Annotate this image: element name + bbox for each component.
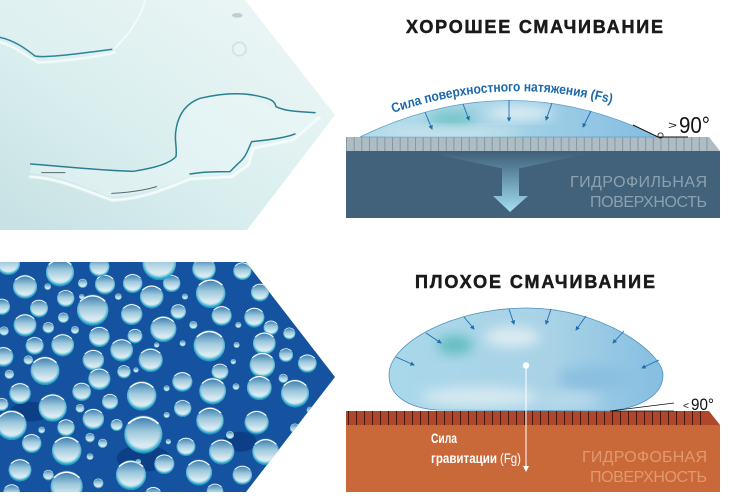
diagram: poor wetting on hydrophobic surface [346, 308, 720, 492]
photo: water beads on blue surface [0, 247, 335, 500]
gravity label [431, 431, 521, 466]
flat water drop [360, 100, 658, 138]
gravity label: Сила [431, 431, 457, 446]
surface label: ПОВЕРХНОСТЬ [590, 194, 707, 211]
contact angle: > [668, 120, 677, 132]
surface label: ГИДРОФОБНАЯ [582, 449, 707, 466]
hydrophobic block [346, 425, 720, 492]
contact angle [633, 112, 710, 138]
surface band [346, 411, 720, 425]
contact angle: 90° [679, 112, 710, 138]
gravity arrow [523, 362, 529, 472]
contact angle: 90° [691, 395, 714, 414]
surface band [346, 137, 720, 151]
gravity label: (Fg) [500, 451, 521, 466]
surface label: ПОВЕРХНОСТЬ [590, 469, 707, 486]
surface label [570, 174, 707, 211]
surface tension label: Сила поверхностного натяжения (Fs) [392, 84, 612, 112]
spreading arrow [430, 153, 590, 212]
hydrophilic block [346, 151, 720, 218]
heading: good wetting: ХОРОШЕЕ СМАЧИВАНИЕ [406, 17, 663, 37]
surface label: ГИДРОФИЛЬНАЯ [570, 174, 707, 191]
heading: poor wetting: ПЛОХОЕ СМАЧИВАНИЕ [415, 272, 655, 292]
surface label [582, 449, 707, 486]
contact angle: < [683, 401, 689, 412]
round water drop [389, 308, 663, 411]
surface tension arrows [425, 100, 591, 129]
gravity label: гравитации [431, 451, 497, 466]
photo: water film on glass [0, 0, 335, 230]
contact angle [610, 395, 714, 414]
surface tension arrows [396, 309, 659, 368]
diagram: good wetting on hydrophilic surface [346, 84, 720, 218]
